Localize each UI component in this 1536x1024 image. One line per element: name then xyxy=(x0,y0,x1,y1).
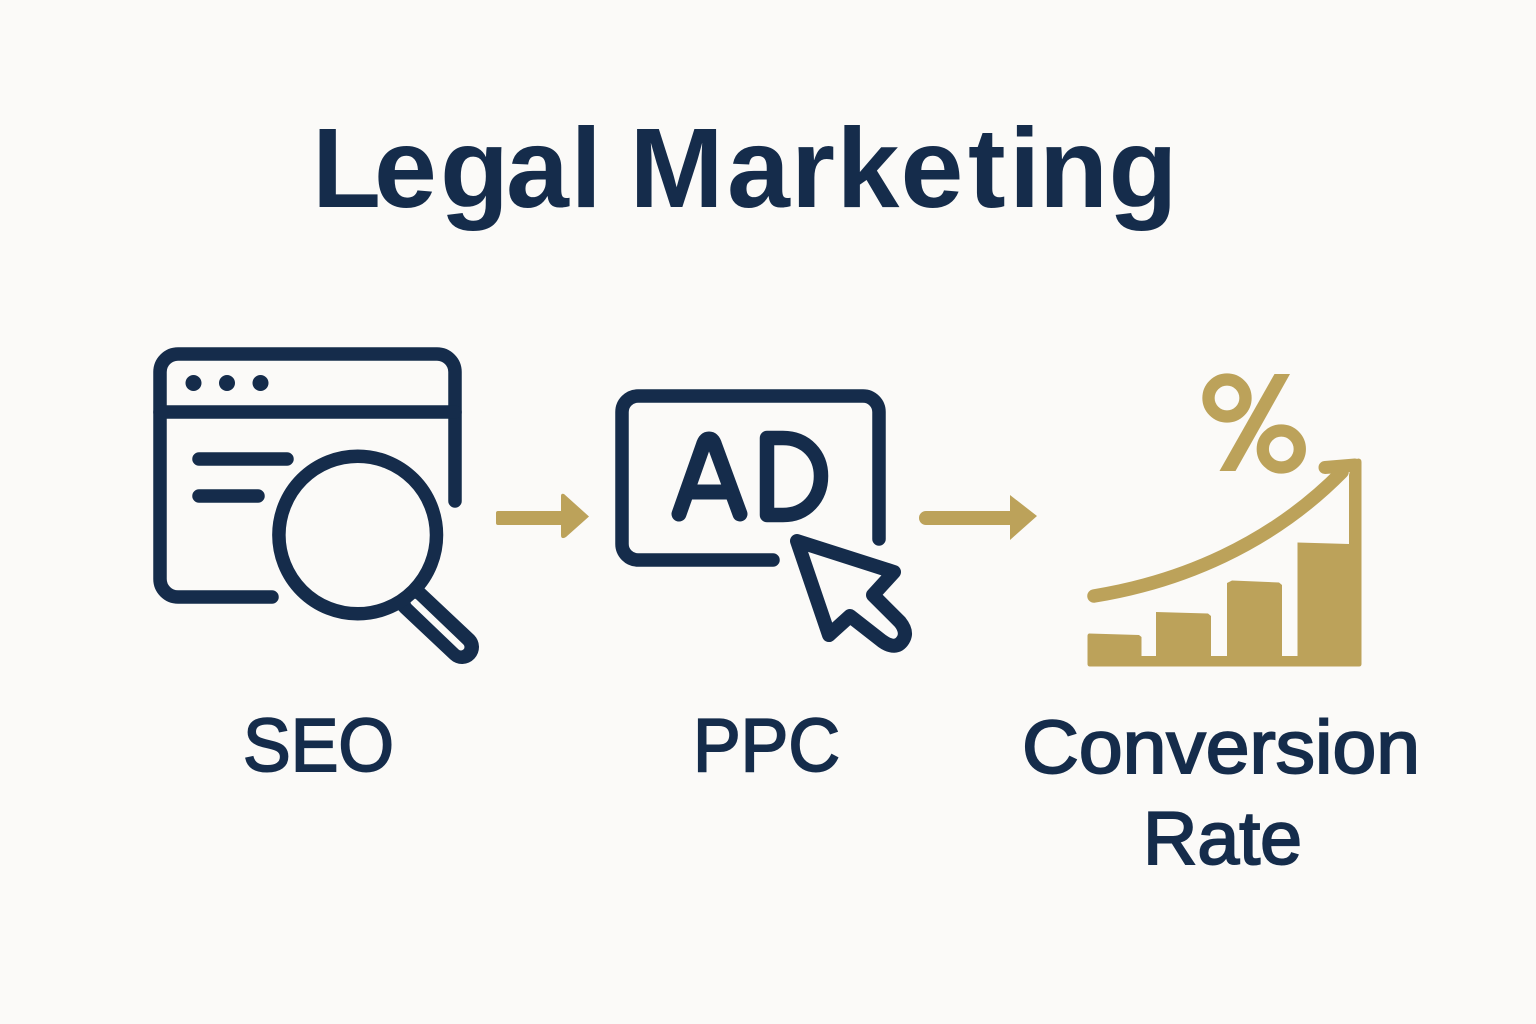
browser toolbar divider xyxy=(160,405,455,419)
magnifier lens xyxy=(279,456,437,614)
ad frame xyxy=(622,396,879,560)
letter A xyxy=(679,439,740,514)
rising bars xyxy=(1088,458,1362,666)
label: Conversion Rate: Conversion xyxy=(1022,705,1420,789)
label: PPC: PPC xyxy=(693,703,840,787)
text lines xyxy=(199,459,287,496)
letter D xyxy=(767,438,821,515)
label: Conversion Rate: Rate xyxy=(1143,796,1302,880)
percent sign xyxy=(1208,374,1300,471)
arrow: PPC to conversion rate xyxy=(919,495,1037,540)
label: Conversion Rate xyxy=(1022,705,1420,880)
arrow: SEO to PPC xyxy=(496,494,589,538)
label: SEO: SEO xyxy=(243,703,394,787)
icon: conversion rate growth chart xyxy=(1088,374,1362,666)
browser dots xyxy=(186,375,268,391)
cursor xyxy=(797,541,905,646)
icon: SEO browser with magnifying glass xyxy=(160,354,462,647)
magnifier handle xyxy=(412,600,462,647)
browser window frame xyxy=(160,354,455,597)
icon: PPC ad with cursor xyxy=(622,396,905,646)
title: Legal Marketing xyxy=(312,105,1178,231)
growth curve arrow xyxy=(1094,465,1355,596)
